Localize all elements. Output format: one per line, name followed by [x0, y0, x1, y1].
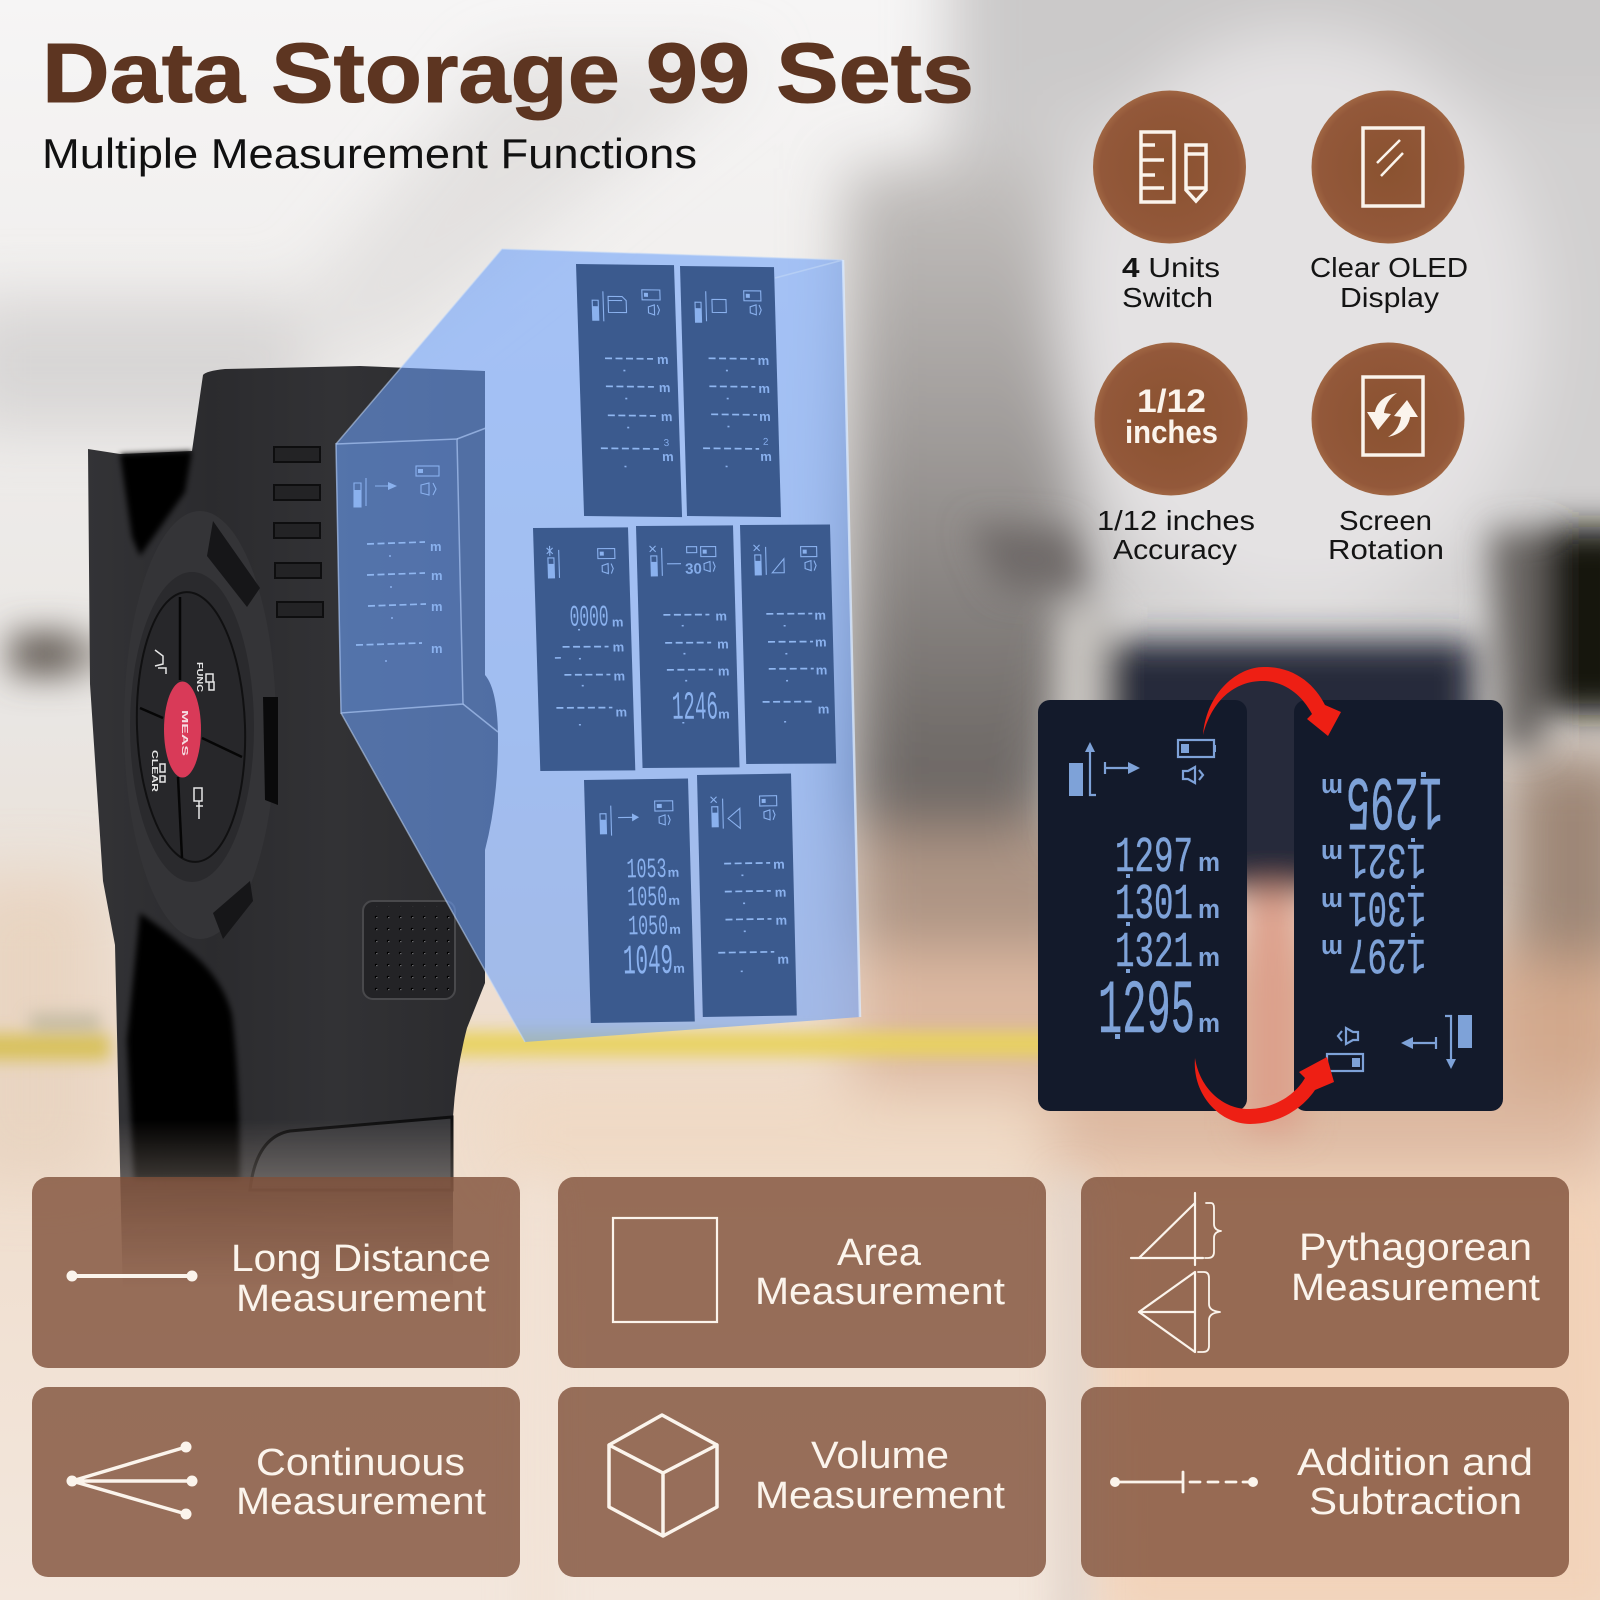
display: normal orientation: 1321	[1115, 925, 1193, 982]
icon: volume cube	[609, 1415, 717, 1536]
arrow: top rotation	[1203, 667, 1341, 736]
icon: screen rotation	[1312, 342, 1464, 496]
display: rotated orientation: 1301	[1348, 877, 1426, 934]
vents	[274, 447, 323, 617]
measurement screen 1: m	[657, 352, 669, 367]
panel: area measurement: Measurement	[755, 1271, 1005, 1313]
measurement screen 6: 1050	[628, 912, 669, 943]
measurement screen 6: m	[667, 865, 679, 880]
front screen in prism: m	[431, 568, 443, 583]
label: screen rotation: Rotation	[1328, 534, 1444, 565]
red measure button: MEAS	[180, 710, 189, 757]
red measure button	[164, 682, 201, 778]
measurement screen 1	[576, 264, 682, 517]
measurement screen 4: m	[715, 608, 727, 624]
display: rotated orientation: m	[1321, 839, 1343, 869]
display: rotated orientation	[1294, 700, 1503, 1111]
label: clear OLED display	[1310, 252, 1468, 313]
icon: clear OLED display	[1312, 90, 1464, 244]
measurement screen 3: m	[615, 704, 627, 720]
measurement screen 4: 1246	[671, 687, 719, 732]
display: normal orientation: m	[1198, 894, 1220, 924]
measurement screen 6: 1050	[627, 883, 668, 914]
label: 1/12 inches accuracy: 1/12 inches	[1097, 505, 1255, 536]
title: Data Storage 99 Sets	[42, 26, 974, 120]
projection prism	[336, 249, 860, 1042]
measurement screen 3: m	[612, 639, 624, 655]
display: normal orientation: m	[1198, 942, 1220, 972]
measurement screen 7: m	[775, 885, 787, 900]
icon: addition line	[1110, 1472, 1258, 1492]
measurement screen 4: m	[718, 663, 730, 679]
label: 4 units switch: Switch	[1122, 282, 1213, 313]
measurement screen 1: m	[659, 380, 671, 395]
measurement screen 5: m	[815, 635, 827, 650]
measurement screen 1: m	[661, 409, 673, 424]
panel: pythagorean measurement: Measurement	[1291, 1267, 1540, 1309]
icon: long distance line	[66, 1270, 198, 1282]
panel: addition and subtraction: Subtraction	[1309, 1481, 1522, 1523]
display: normal orientation	[1038, 700, 1247, 1111]
display: rotated orientation: 1295	[1346, 756, 1443, 842]
label: clear OLED display: Display	[1340, 282, 1439, 313]
measurement screen 2: m	[759, 409, 771, 424]
panel: volume measurement: Volume	[811, 1435, 949, 1477]
panel: continuous measurement	[32, 1387, 520, 1577]
label: 4 units switch: 4 Units	[1122, 252, 1220, 283]
panel: pythagorean measurement: Pythagorean	[1299, 1227, 1532, 1269]
panel: continuous measurement: Continuous	[256, 1442, 465, 1484]
measurement screen 5: m	[814, 608, 826, 623]
icon: continuous rays	[66, 1442, 198, 1520]
label: clear OLED display: Clear OLED	[1310, 252, 1468, 283]
icon: pythagorean triangles	[1131, 1193, 1221, 1352]
icon: 1/12 inches: 1/12	[1137, 383, 1206, 419]
panel: area measurement	[558, 1177, 1046, 1368]
measurement screen 1: m	[662, 449, 674, 464]
measurement screen 6: m	[669, 922, 681, 937]
panel: volume measurement	[558, 1387, 1046, 1577]
measurement screen 6: m	[673, 961, 685, 976]
panel: continuous measurement: Measurement	[236, 1481, 486, 1523]
front screen in prism: m	[430, 539, 442, 554]
measurement screen 6: 1049	[622, 938, 674, 987]
measurement screen 4: 30	[685, 561, 702, 578]
laser measure device	[88, 366, 498, 1300]
display: rotated orientation: 1321	[1348, 829, 1426, 886]
measurement screen 4: m	[717, 636, 729, 652]
front screen in prism: m	[431, 599, 443, 614]
measurement screen 2: m	[760, 449, 772, 464]
measurement screen 7	[697, 773, 797, 1017]
label: screen rotation: Screen	[1339, 505, 1432, 536]
display: normal orientation: m	[1198, 847, 1220, 877]
display: rotated orientation: m	[1321, 887, 1343, 917]
measurement screen 4: m	[718, 706, 730, 722]
measurement screen 5: m	[816, 663, 828, 678]
func label: FUNC	[195, 662, 204, 692]
panel: long distance measurement: Long Distance	[231, 1238, 491, 1280]
display: normal orientation: 1295	[1098, 969, 1195, 1055]
measurement screen 4	[636, 525, 740, 768]
panel: long distance measurement	[32, 1177, 520, 1368]
panel: area measurement: Area	[837, 1232, 922, 1274]
rubber side button	[363, 901, 455, 999]
display: normal orientation: 1297	[1115, 830, 1193, 887]
measurement screen 5: m	[818, 701, 830, 717]
panel: volume measurement: Measurement	[755, 1475, 1005, 1517]
panel: pythagorean measurement	[1081, 1177, 1569, 1368]
measurement screen 2: m	[757, 353, 769, 368]
measurement screen 3: 0000	[569, 602, 609, 636]
icon: 4 units switch	[1093, 90, 1246, 244]
icon: area rectangle	[613, 1218, 717, 1322]
display: rotated orientation: m	[1321, 934, 1343, 964]
measurement screen 7: m	[773, 857, 785, 872]
button icons	[155, 650, 214, 819]
label: screen rotation	[1328, 505, 1444, 565]
subtitle: Multiple Measurement Functions	[42, 130, 697, 177]
dial ring	[124, 511, 278, 939]
measurement screen 6	[584, 779, 695, 1023]
label: 1/12 inches accuracy	[1097, 505, 1255, 565]
display: rotated orientation: 1297	[1348, 924, 1426, 981]
measurement screen 6: 1053	[626, 855, 667, 886]
display: normal orientation: 1301	[1115, 877, 1193, 934]
measurement screen 3: m	[612, 614, 624, 630]
panel: addition and subtraction: Addition and	[1297, 1442, 1533, 1484]
measurement screen 7: m	[775, 913, 787, 928]
display: rotated orientation: m	[1321, 773, 1343, 803]
panel: long distance measurement: Measurement	[236, 1278, 486, 1320]
lower seam panel	[250, 1117, 452, 1190]
label: 1/12 inches accuracy: Accuracy	[1113, 534, 1237, 565]
clear label: CLEAR	[150, 750, 159, 792]
icon: 1/12 inches	[1094, 342, 1248, 496]
measurement screen 7: m	[777, 952, 789, 967]
device shadow cut-outs	[120, 451, 240, 1180]
measurement screen 3: m	[613, 668, 625, 684]
measurement screen 5	[740, 524, 836, 764]
measurement screen 2: 2	[763, 437, 769, 448]
measurement screen 2: m	[758, 381, 770, 396]
measurement screen 2	[680, 266, 781, 517]
front screen in prism: m	[431, 641, 443, 656]
front screen in prism	[354, 466, 443, 661]
measurement screen 1: 3	[664, 438, 670, 449]
display: normal orientation: m	[1198, 1008, 1220, 1038]
label: 4 units switch	[1122, 252, 1220, 313]
measurement screen 6: m	[668, 893, 680, 908]
arrow: bottom rotation	[1195, 1057, 1334, 1124]
panel: addition and subtraction	[1081, 1387, 1569, 1577]
icon: 1/12 inches: inches	[1125, 414, 1218, 450]
measurement screen 3	[533, 527, 635, 771]
